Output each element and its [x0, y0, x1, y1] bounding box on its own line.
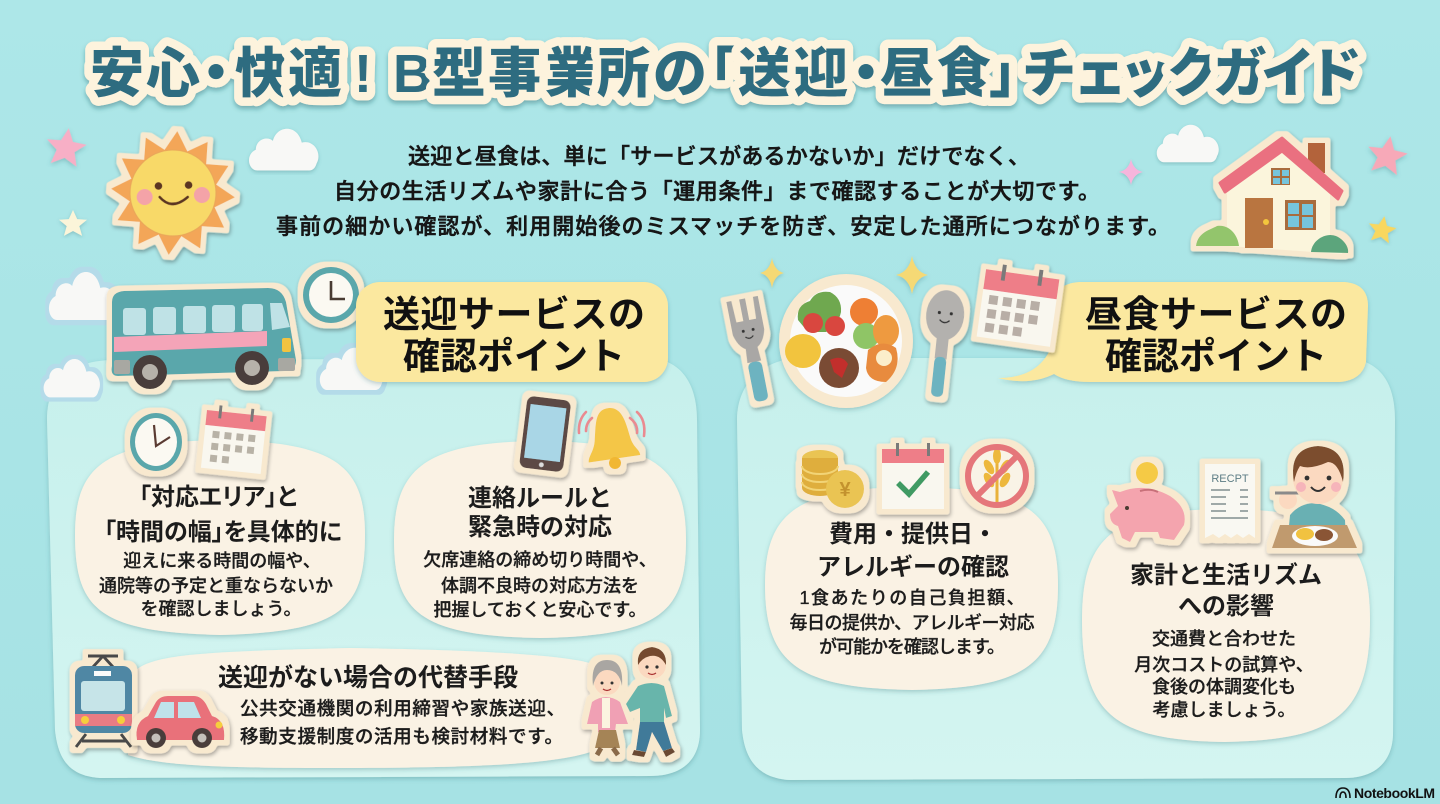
icon: piggy bank [1110, 462, 1185, 542]
icon: pink star right [1364, 133, 1410, 176]
icon: sparkle left [760, 258, 784, 288]
card: cost and allergy: アレルギーの確認 [817, 554, 1009, 581]
card: cost and allergy: が可能かを確認します。 [819, 636, 1005, 657]
icon: cloud top left [249, 129, 318, 170]
card: cost and allergy: 毎日の提供か、アレルギー対応 [790, 613, 1034, 633]
heading plate with tail [998, 282, 1368, 382]
heading: transport: 確認ポイント [403, 336, 625, 377]
intro text: 送迎と昼食は、単に「サービスがあるかないか」だけでなく、 [408, 144, 1030, 169]
panel: lunch [726, 256, 1395, 780]
card: cost and allergy: 費用・提供日・ [829, 521, 997, 548]
icon: bus [112, 288, 296, 389]
icon: spoon [918, 288, 967, 399]
card background [75, 440, 365, 635]
intro text: 事前の細かい確認が、利用開始後のミスマッチを防ぎ、安定した通所につながります。 [276, 214, 1170, 239]
icon: notebook logo [1336, 788, 1350, 798]
card: contact rules [394, 396, 686, 638]
panel: transport [44, 267, 700, 778]
icon: bell waves [579, 412, 644, 436]
icon: phone [519, 396, 571, 472]
card: alternatives: 送迎がない場合の代替手段 [218, 663, 518, 692]
icon: people [587, 647, 675, 757]
card: household and rhythm: 月次コストの試算や、 [1134, 655, 1314, 675]
heading: transport [356, 282, 668, 382]
card: area and time: 迎えに来る時間の幅や、 [123, 551, 321, 571]
card: cost and allergy [765, 443, 1058, 690]
card: area and time [75, 404, 365, 635]
icon: calendar check [882, 443, 944, 509]
card: household and rhythm: への影響 [1178, 593, 1274, 620]
icon: calendar header [977, 262, 1060, 347]
icon: yellow star right [1366, 214, 1398, 244]
card: household and rhythm [1082, 446, 1370, 742]
icon: boy eating [1272, 446, 1357, 548]
icon: sun [107, 127, 239, 259]
icon: plate with food [779, 274, 913, 408]
icon: car [136, 696, 224, 748]
watermark: NotebookLM [1354, 785, 1435, 801]
card: area and time: を確認しましょう。 [141, 599, 301, 619]
intro text: 自分の生活リズムや家計に合う「運用条件」まで確認することが大切です。 [334, 179, 1100, 204]
icon: clock header [303, 267, 359, 323]
icon: fork [726, 296, 778, 404]
icon: coins: ¥ [839, 479, 851, 501]
icon: pink star [44, 125, 89, 168]
title: 安心・快適!B型事業所の「送迎・昼食」チェックガイド [90, 44, 1362, 104]
heading: lunch [998, 282, 1368, 382]
icon: train [75, 656, 132, 747]
icon: no wheat [965, 444, 1029, 508]
card: contact rules: 緊急時の対応 [468, 514, 612, 541]
card: contact rules: 体調不良時の対応方法を [441, 576, 639, 596]
card: alternatives: 移動支援制度の活用も検討材料です。 [240, 726, 563, 747]
heading plate [356, 282, 668, 382]
card: household and rhythm: 食後の体調変化も [1152, 677, 1296, 697]
card: area and time: 「対応エリア」と [139, 484, 297, 511]
card background [394, 441, 686, 638]
card background [1082, 509, 1370, 742]
card: contact rules: 連絡ルールと [468, 485, 612, 512]
card: cost and allergy: 1食あたりの自己負担額、 [800, 588, 1024, 608]
heading: lunch: 昼食サービスの [1085, 294, 1347, 335]
icon: sparkle right [896, 256, 928, 294]
icon: receipt [1205, 464, 1255, 538]
icon: cloud right [320, 348, 384, 390]
icon: bell [583, 405, 640, 469]
icon: cream star [59, 210, 87, 236]
card: household and rhythm: 考慮しましょう。 [1153, 700, 1295, 720]
icon: clock [130, 413, 182, 471]
card: household and rhythm: 交通費と合わせた [1152, 629, 1296, 649]
panel background [47, 358, 700, 778]
icon: calendar [201, 404, 267, 474]
heading: transport: 送迎サービスの [383, 294, 645, 335]
heading: lunch: 確認ポイント [1105, 336, 1327, 377]
icon: receipt: RECPT [1211, 473, 1249, 485]
icon: house [1196, 138, 1348, 254]
card background [128, 648, 596, 768]
card: contact rules: 把握しておくと安心です。 [433, 600, 647, 620]
intro text [276, 144, 1170, 239]
icon: cloud top right [1157, 125, 1219, 162]
card: area and time: 「時間の幅」を具体的に [104, 519, 342, 546]
card: alternatives [75, 647, 675, 768]
card: alternatives: 公共交通機関の利用締習や家族送迎、 [240, 698, 565, 719]
icon: sparkle pink [1119, 159, 1143, 185]
card: household and rhythm: 家計と生活リズム [1130, 561, 1322, 589]
icon: cloud upper left [49, 272, 117, 320]
card: contact rules: 欠席連絡の締め切り時間や、 [423, 550, 657, 570]
icon: cloud lower left [44, 359, 100, 397]
panel background [737, 358, 1395, 780]
card background [765, 487, 1058, 690]
icon: coins [802, 450, 864, 508]
card: area and time: 通院等の予定と重ならないか [99, 576, 333, 596]
